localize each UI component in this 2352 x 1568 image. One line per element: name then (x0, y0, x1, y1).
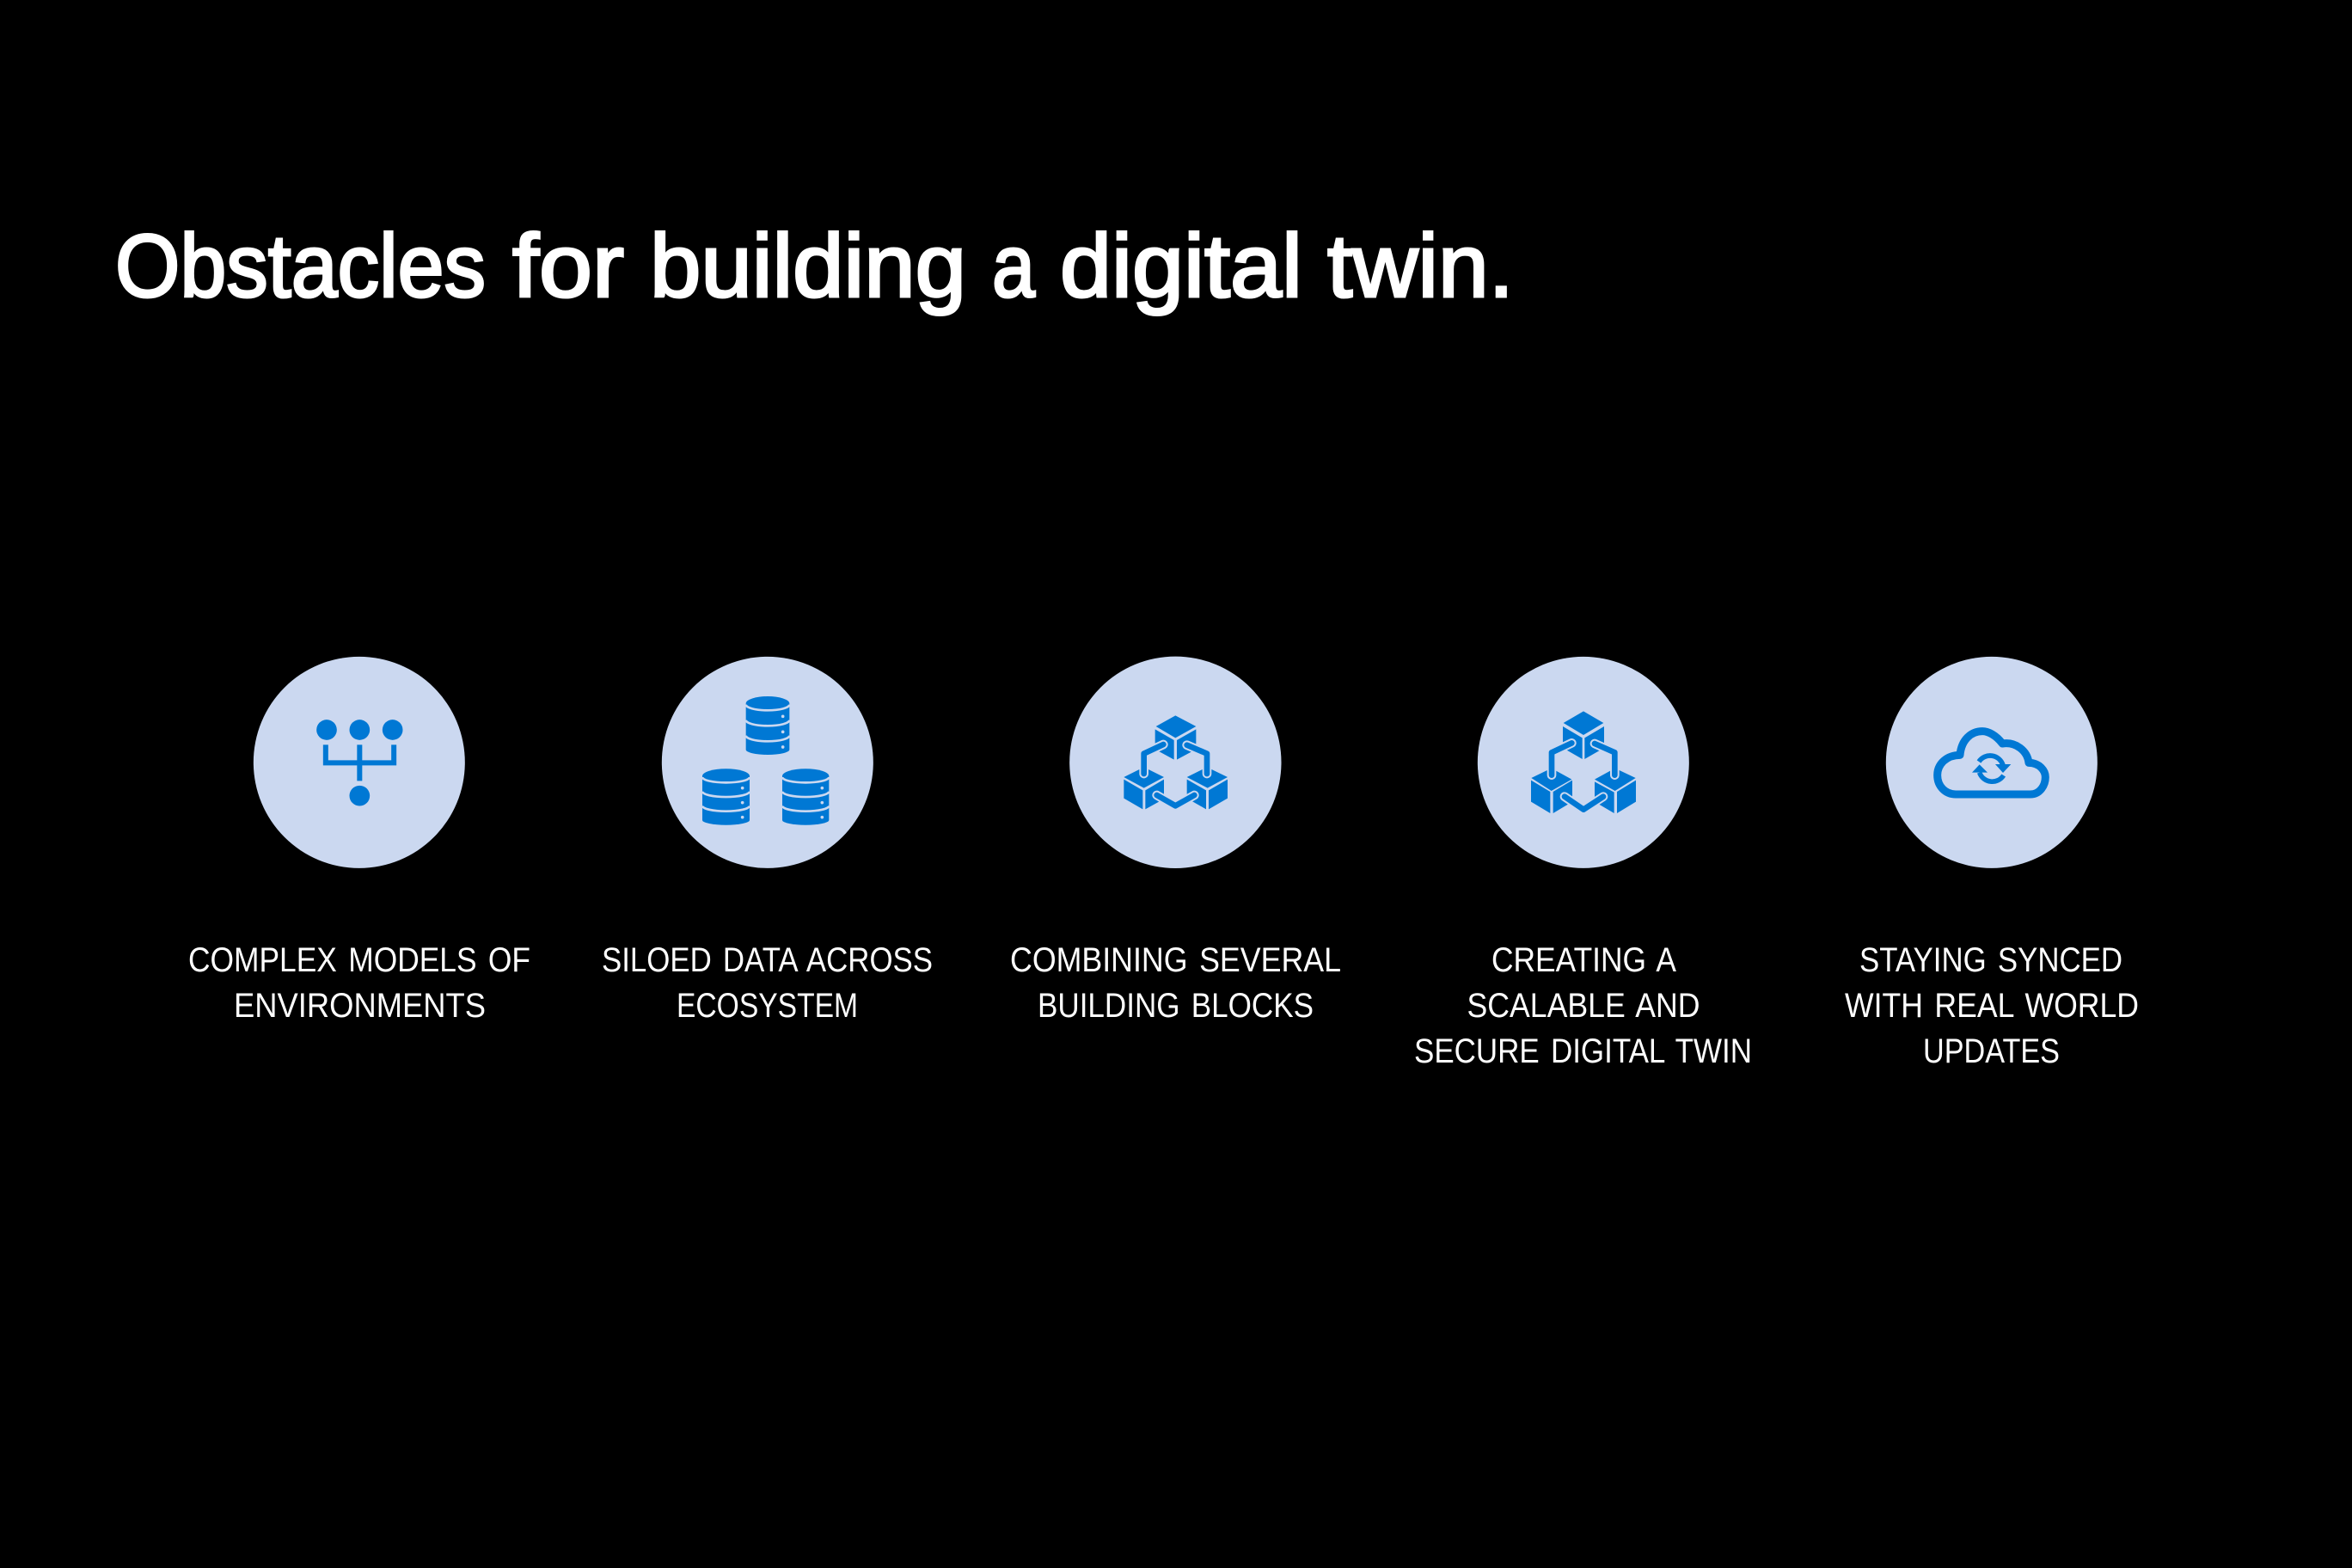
label: staying synced: STAYING SYNCED (1859, 941, 2122, 979)
panel: building blocks (1010, 657, 1341, 1025)
panel: siloed data (602, 657, 933, 1025)
panel: scalable and secure (1414, 657, 1752, 1070)
label: building blocks: BUILDING BLOCKS (1038, 987, 1314, 1025)
icon: cloud sync (1886, 657, 2098, 868)
label: staying synced (1845, 941, 2139, 1070)
label: siloed data: ECOSYSTEM (677, 987, 858, 1025)
label: scalable and secure: SCALABLE AND (1467, 987, 1700, 1025)
title: Obstacles (115, 217, 486, 316)
icon: linked cubes (1069, 657, 1281, 868)
panel: staying synced (1845, 657, 2139, 1070)
title: building (650, 217, 966, 316)
title: digital (1060, 217, 1302, 316)
panel: complex models (188, 657, 530, 1025)
label: scalable and secure (1414, 941, 1752, 1070)
label: building blocks: COMBINING SEVERAL (1010, 941, 1341, 979)
label: siloed data: SILOED DATA ACROSS (602, 941, 933, 979)
title: twin. (1327, 217, 1514, 316)
label: building blocks (1010, 941, 1341, 1025)
icon: databases (662, 657, 873, 868)
icon: hierarchy tree (254, 657, 465, 868)
title: for (512, 217, 624, 316)
label: staying synced: WITH REAL WORLD (1845, 987, 2139, 1025)
label: staying synced: UPDATES (1923, 1032, 2060, 1070)
icon: linked cubes large (1478, 657, 1689, 868)
label: siloed data (602, 941, 933, 1025)
label: scalable and secure: CREATING A (1491, 941, 1676, 979)
label: scalable and secure: SECURE DIGITAL TWIN (1414, 1032, 1752, 1070)
label: complex models: ENVIRONMENTS (234, 987, 486, 1025)
label: complex models: COMPLEX MODELS OF (188, 941, 530, 979)
title: a (992, 217, 1035, 316)
label: complex models (188, 941, 530, 1025)
